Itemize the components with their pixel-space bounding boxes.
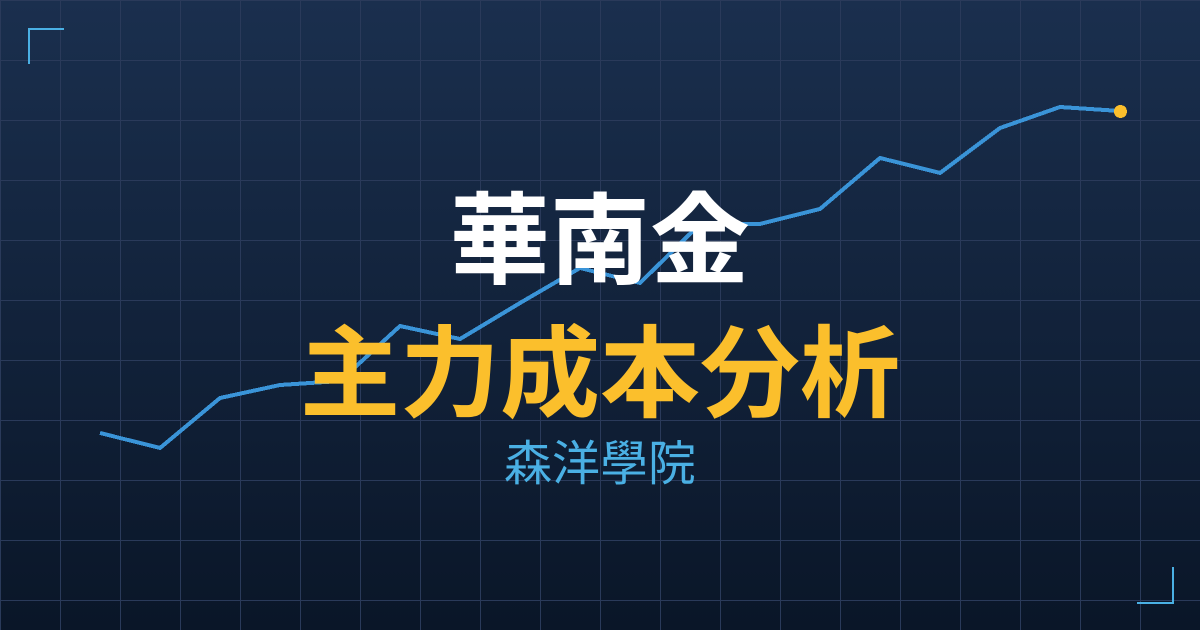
line chart	[100, 105, 1127, 448]
corner bracket: top left	[29, 29, 64, 64]
title: analysis: 主力成本分析	[300, 319, 900, 431]
title: stock name: 華南金	[450, 186, 750, 298]
chart end point	[1114, 105, 1127, 118]
subtitle: brand: 森洋學院	[504, 438, 696, 491]
corner bracket: bottom right	[1137, 567, 1173, 603]
